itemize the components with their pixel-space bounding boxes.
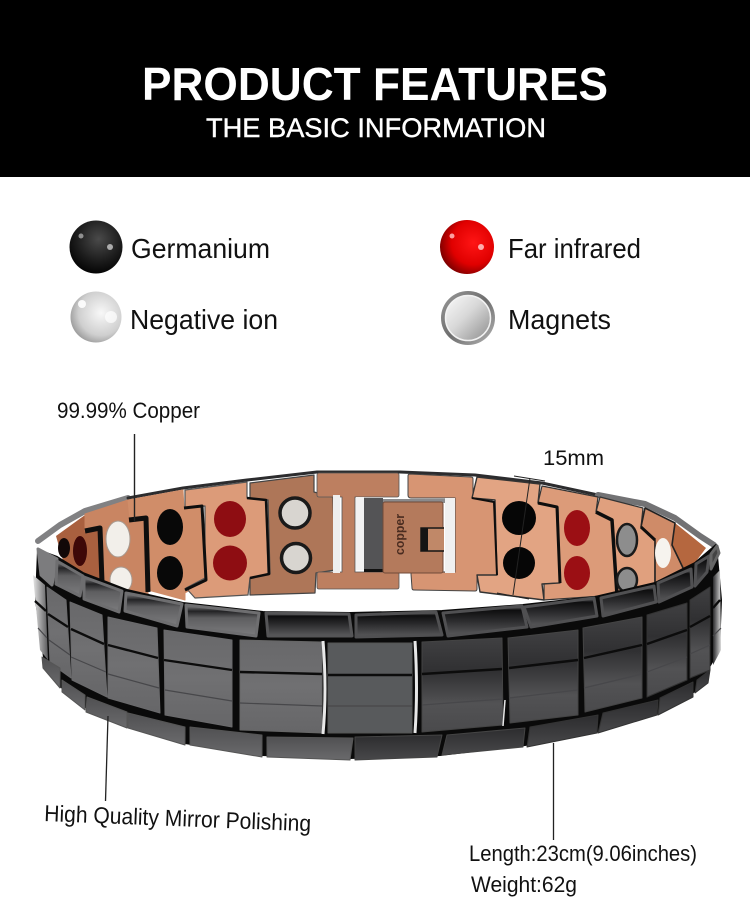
magnets bbox=[58, 498, 671, 593]
grey magnets right bbox=[617, 524, 637, 556]
legend bbox=[70, 220, 641, 345]
right clasp link bbox=[408, 474, 497, 591]
silver link edges bbox=[323, 641, 505, 734]
far infrared magnets right bbox=[564, 510, 590, 546]
legend item: magnets bbox=[441, 291, 611, 345]
back rim bbox=[38, 472, 714, 545]
clasp left plate bbox=[317, 473, 399, 589]
clasp stamp: copper bbox=[393, 514, 407, 555]
main row dividers bbox=[35, 600, 721, 706]
callout: 15mm width bbox=[497, 447, 604, 599]
front band bbox=[33, 545, 721, 760]
lower row links bbox=[42, 657, 710, 760]
germanium magnets left bbox=[157, 509, 183, 545]
bracelet bbox=[33, 472, 721, 760]
legend item: far infrared: Far infrared bbox=[508, 233, 641, 264]
callout: length and weight: Weight:62g bbox=[471, 872, 577, 897]
germanium magnets right bbox=[502, 501, 536, 535]
callout: length and weight: Length:23cm(9.06inches) bbox=[469, 841, 697, 866]
upper row links bbox=[38, 546, 719, 637]
negative ion ringed magnets centre bbox=[280, 498, 310, 528]
far infrared magnets left bbox=[214, 501, 246, 537]
black band backing bbox=[36, 545, 721, 758]
far-left magnets bbox=[58, 538, 70, 558]
legend item: magnets: Magnets bbox=[508, 304, 611, 335]
subtitle: THE BASIC INFORMATION bbox=[206, 113, 546, 143]
legend item: germanium bbox=[70, 220, 270, 274]
main row links bbox=[33, 570, 721, 733]
white magnet far right bbox=[655, 538, 671, 568]
legend item: far infrared bbox=[440, 220, 641, 274]
link notch shadows bbox=[85, 498, 655, 595]
legend item: negative ion: Negative ion bbox=[130, 304, 278, 335]
clasp tongue bbox=[383, 499, 445, 573]
legend item: negative ion bbox=[70, 292, 278, 342]
title: PRODUCT FEATURES bbox=[142, 58, 608, 110]
callout: 15mm width: 15mm bbox=[543, 447, 604, 470]
callout: length and weight bbox=[469, 743, 697, 897]
legend item: germanium: Germanium bbox=[131, 233, 270, 264]
negative ion magnets left bbox=[106, 521, 130, 557]
header banner bbox=[0, 0, 750, 177]
callout: mirror polishing: High Quality Mirror Polishing bbox=[44, 800, 312, 836]
inner copper band bbox=[38, 472, 714, 600]
callout: copper: 99.99% Copper bbox=[57, 398, 200, 423]
